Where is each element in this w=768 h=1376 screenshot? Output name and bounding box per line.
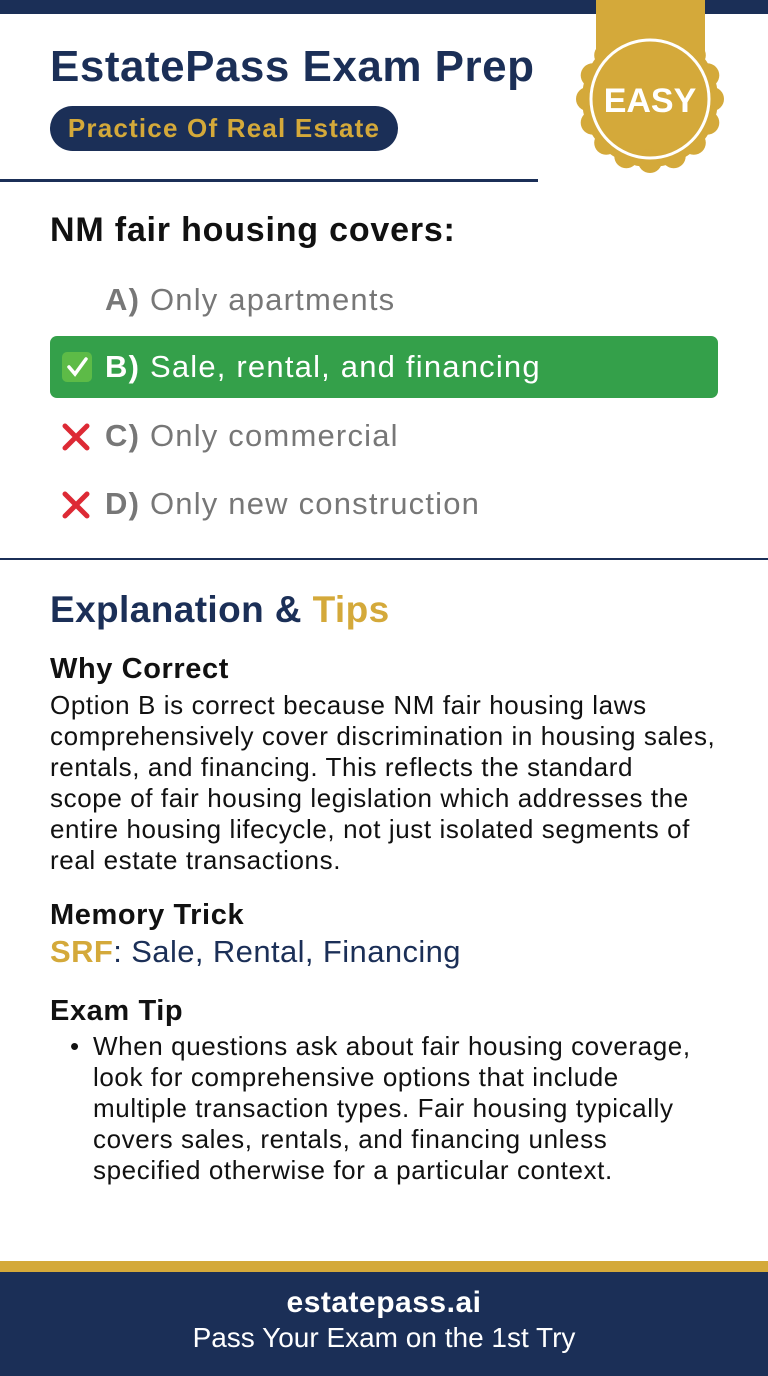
why correct: real estate transactions.: [50, 845, 341, 875]
footer: Pass Your Exam on the 1st Try: [193, 1322, 575, 1353]
exam tip: look for comprehensive options that include: [93, 1062, 619, 1092]
exam tip: covers sales, rentals, and financing unless: [93, 1124, 607, 1154]
option B correct: B) Sale, rental, and financing: [105, 349, 541, 384]
why correct: [50, 653, 715, 875]
exam tip: Exam Tip: [50, 995, 183, 1027]
exam tip: specified otherwise for a particular context.: [93, 1155, 613, 1185]
exam tip: [50, 995, 691, 1185]
exam tip: •: [70, 1031, 80, 1061]
option B correct: [50, 336, 718, 398]
option D: D) Only new construction: [105, 486, 480, 521]
question: NM fair housing covers:: [50, 211, 456, 249]
why correct: Option B is correct because NM fair housing laws: [50, 690, 647, 720]
subtitle pill: [50, 106, 398, 151]
exam tip: multiple transaction types. Fair housing typically: [93, 1093, 674, 1123]
why correct: comprehensively cover discrimination in housing sales,: [50, 721, 715, 751]
exam tip: When questions ask about fair housing coverage,: [93, 1031, 691, 1061]
footer: [0, 1261, 768, 1376]
option C: C) Only commercial: [105, 418, 399, 453]
option A: A) Only apartments: [105, 282, 395, 317]
memory trick: [50, 899, 461, 969]
subtitle pill: Practice Of Real Estate: [68, 113, 380, 143]
memory trick: Memory Trick: [50, 899, 244, 931]
badge: EASY: [576, 0, 724, 173]
memory trick: SRF: Sale, Rental, Financing: [50, 934, 461, 969]
why correct: scope of fair housing legislation which addresses the: [50, 783, 689, 813]
why correct: rentals, and financing. This reflects the standard: [50, 752, 633, 782]
footer: estatepass.ai: [287, 1286, 481, 1319]
why correct: entire housing lifecycle, not just isolated segments of: [50, 814, 690, 844]
icon: cross: [62, 492, 90, 518]
explanation heading: Explanation & Tips: [50, 589, 390, 630]
badge: EASY: EASY: [604, 82, 697, 120]
title: EstatePass Exam Prep: [50, 42, 535, 91]
top bar: [0, 0, 768, 14]
why correct: Why Correct: [50, 653, 229, 685]
icon: cross: [62, 424, 90, 450]
icon: check: [62, 352, 92, 382]
